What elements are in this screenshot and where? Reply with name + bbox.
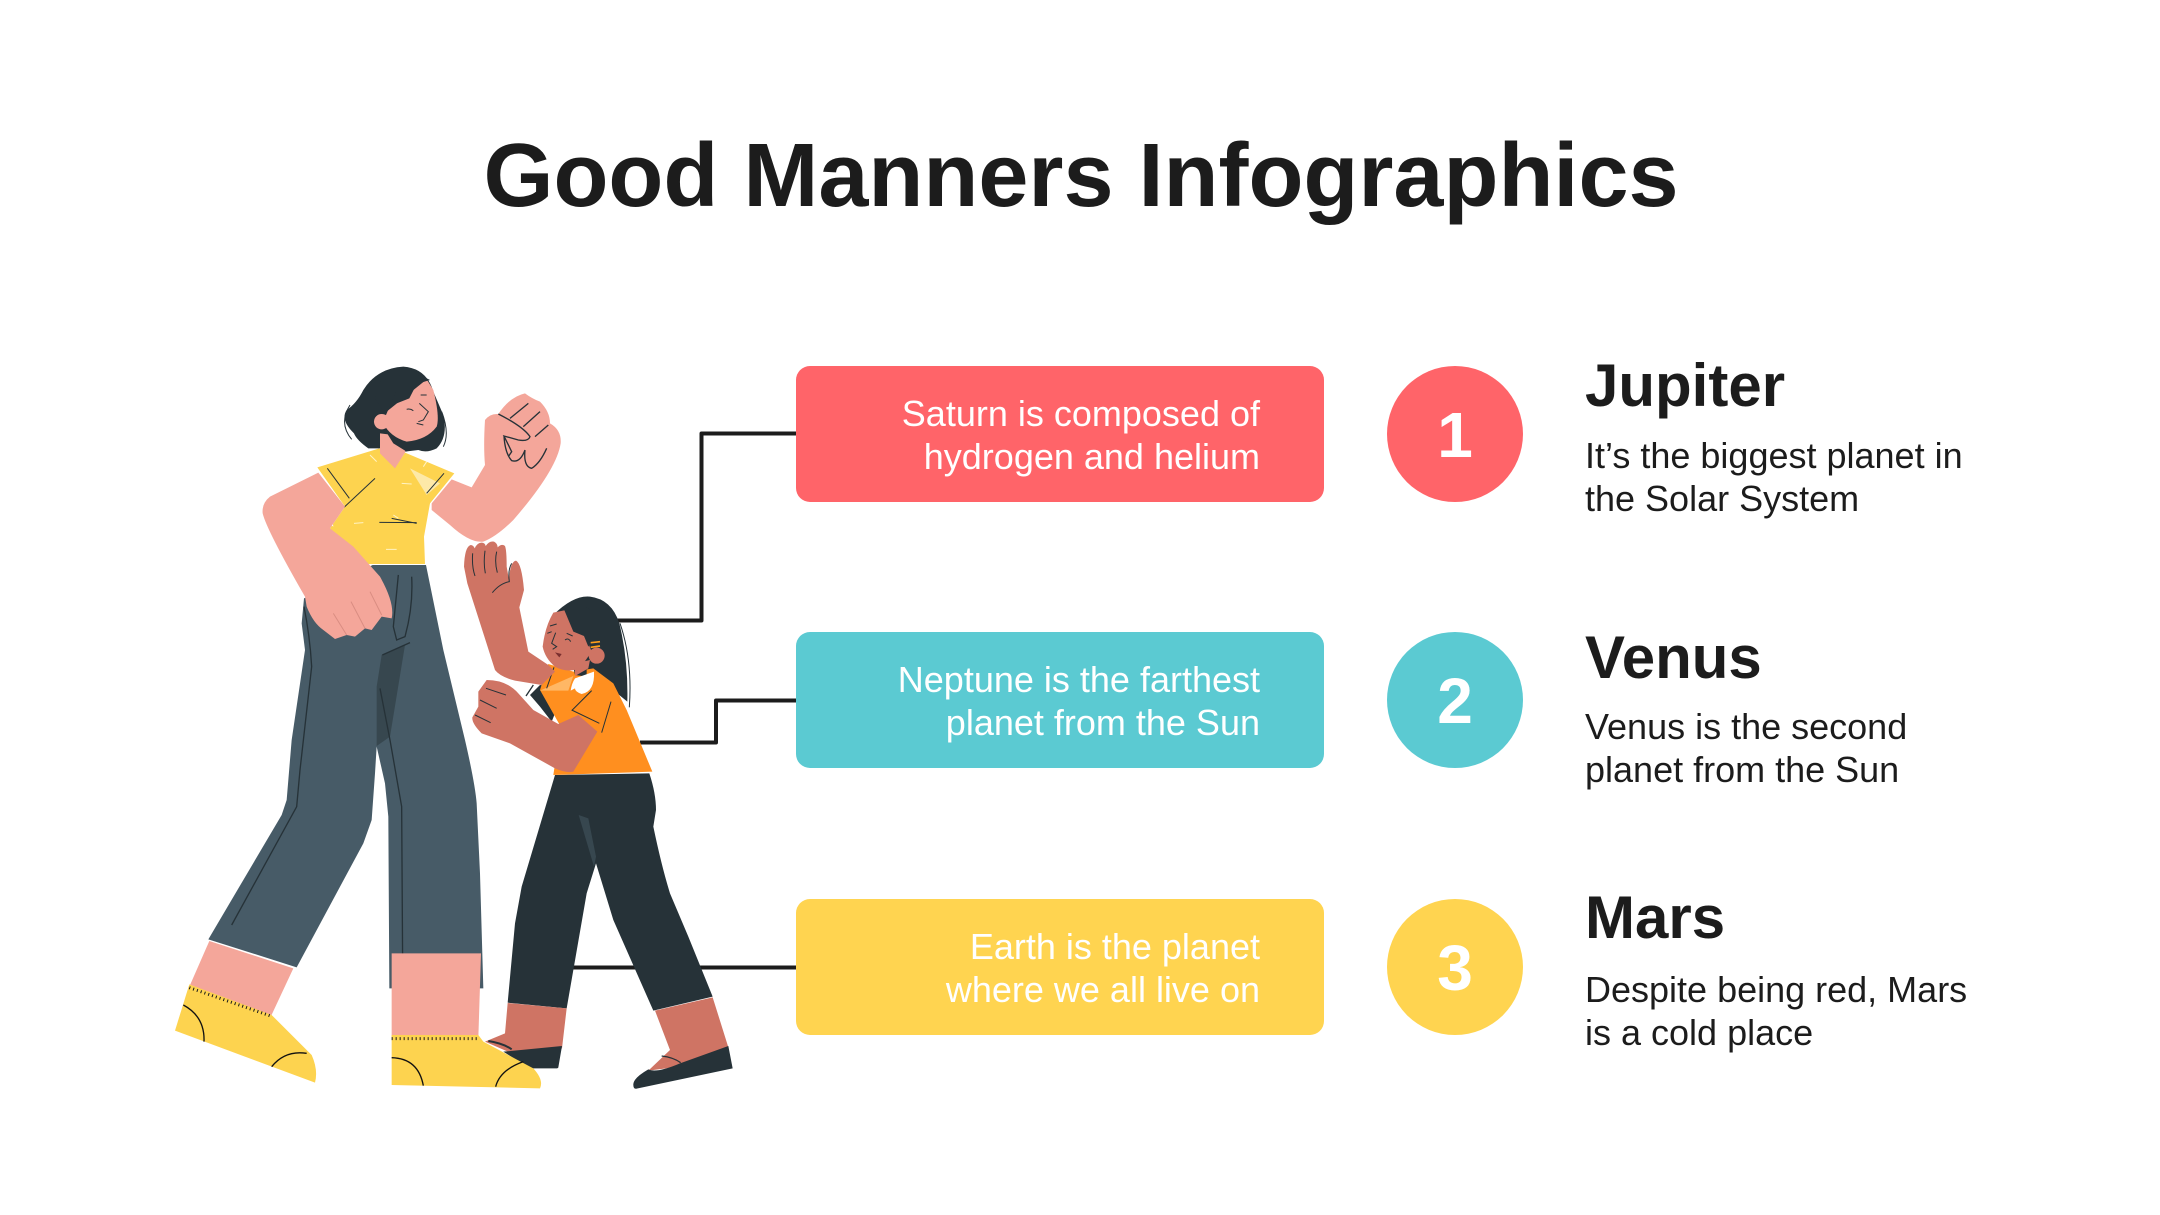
title: Good Manners Infographics [483,126,1679,226]
connector lines [570,434,796,968]
box text 2: planet from the Sun [946,702,1260,743]
girl hair back [553,597,627,702]
woman head [380,433,407,468]
box text 2 [898,659,1260,743]
girl raised arm [464,542,555,685]
woman hair [345,367,445,452]
text: Venus [1585,706,1907,790]
panel: row 1 box [796,366,1324,502]
figure: woman [175,367,561,1088]
woman legs [392,953,481,1038]
number circle 3: 3 [1437,932,1473,1004]
girl legs [485,1003,567,1053]
girl trousers [508,773,713,1011]
girl shirt [540,664,652,775]
panel: row 3 box [796,899,1324,1035]
heading: Jupiter: Jupiter [1585,352,1785,419]
woman raised fist [432,393,561,542]
number circle 1 [1387,366,1523,502]
box text 1 [902,393,1260,477]
box text 1: Saturn is composed of [902,393,1260,434]
box text 2: Neptune is the farthest [898,659,1260,700]
text: Mars: Despite being red, Mars [1585,969,1967,1010]
girl lower arm [472,680,597,772]
text: Venus: Venus is the second [1585,706,1907,747]
text: Mars: is a cold place [1585,1012,1813,1053]
heading: Mars: Mars [1585,884,1725,951]
woman shirt [317,448,454,564]
number circle 2 [1387,632,1523,768]
woman trousers [208,565,483,988]
number circle 3 [1387,899,1523,1035]
text: Jupiter [1585,435,1963,519]
panel: row 2 box [796,632,1324,768]
text: Jupiter: the Solar System [1585,478,1859,519]
woman shoes [175,984,316,1083]
girl shoes [503,1046,562,1068]
woman arm down [263,473,392,639]
text: Mars [1585,969,1967,1053]
text: Venus: planet from the Sun [1585,749,1899,790]
girl head [573,667,587,677]
box text 3: where we all live on [946,969,1260,1010]
box text 3: Earth is the planet [970,926,1260,967]
heading: Venus: Venus [1585,624,1762,691]
number circle 1: 1 [1437,399,1473,471]
text: Jupiter: It’s the biggest planet in [1585,435,1963,476]
box text 1: hydrogen and helium [924,436,1260,477]
box text 3 [946,926,1260,1010]
figure: girl [464,542,733,1089]
number circle 2: 2 [1437,665,1473,737]
